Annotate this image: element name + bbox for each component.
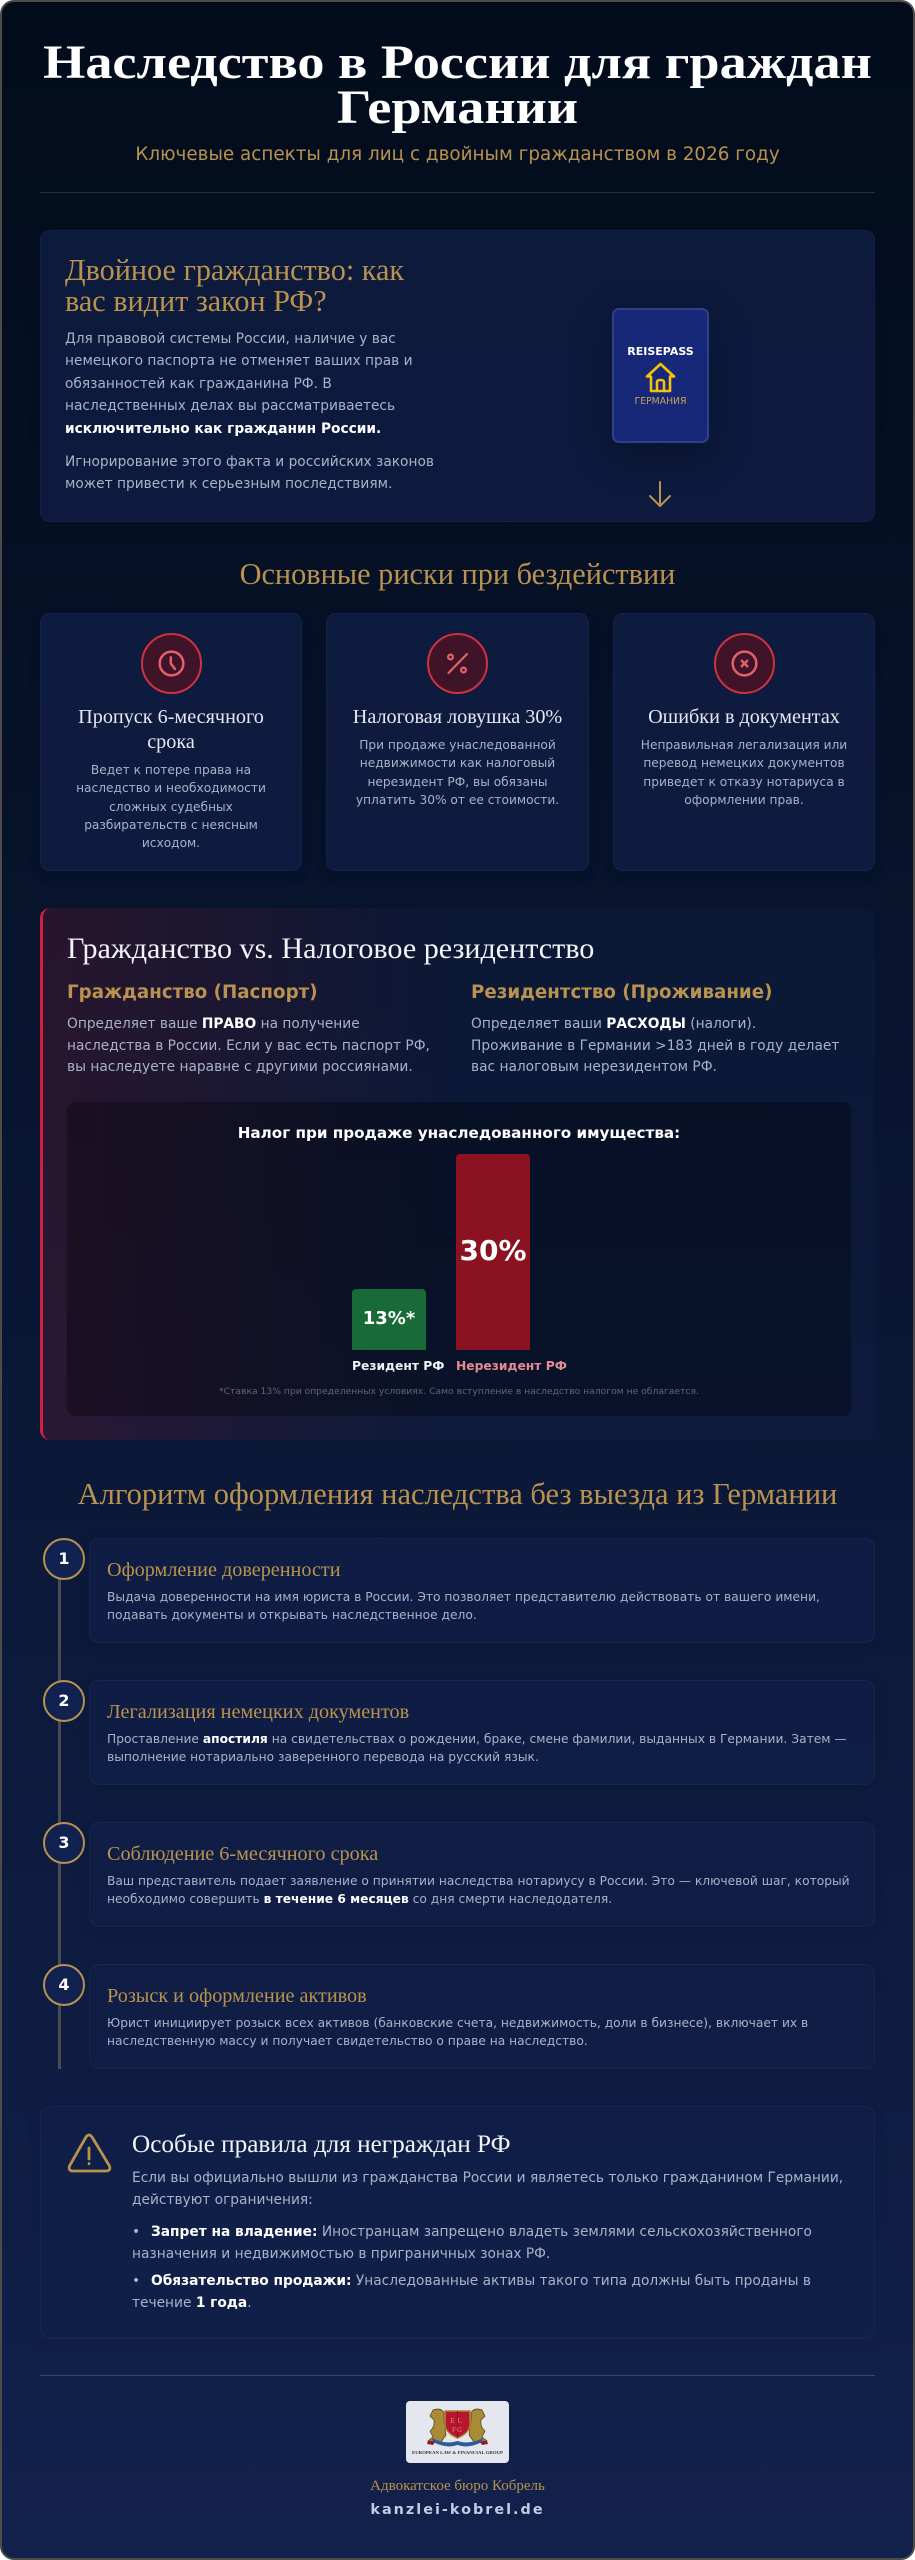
step 3 title: Соблюдение 6-месячного срока [107, 1843, 378, 1865]
risk 2 title: Налоговая ловушка 30% [353, 706, 562, 728]
panel: dual citizenship [40, 230, 875, 522]
text: dual citizenship explanation: наследственных делах вы рассматриваетесь [65, 398, 395, 414]
residency text [471, 1016, 839, 1075]
risk 2 text: нерезидент РФ, вы обязаны [367, 775, 548, 789]
text: dual citizenship explanation: немецкого паспорта не отменяет ваших прав и [65, 353, 413, 369]
column: residency [471, 982, 839, 1075]
step 3 card [89, 1822, 875, 1927]
text: warning about ignoring: может привести к серьезным последствиям. [65, 476, 392, 492]
icon: percent [427, 633, 488, 694]
text: dual citizenship explanation [65, 331, 413, 437]
list item: ownership ban: назначения и недвижимостью в приграничных зонах РФ. [132, 2246, 550, 2262]
passport label: REISEPASS [627, 345, 694, 358]
step 1 number [43, 1538, 85, 1580]
residency text: Проживание в Германии >183 дней в году делает [471, 1038, 839, 1054]
risk 3 title: Ошибки в документах [648, 706, 840, 728]
heading: risks: Основные риски при бездействии [240, 557, 675, 591]
step 4 text: наследственную массу и получает свидетельство о праве на наследство. [107, 2034, 588, 2048]
risk 1 title: Пропуск 6-месячного [78, 706, 264, 728]
step 4 number: 4 [58, 1975, 70, 1994]
risk 3 text: Неправильная легализация или [641, 738, 847, 752]
panel: risk 1 [40, 613, 302, 871]
logo: FG [452, 2426, 463, 2434]
risk 1 text: Ведет к потере права на [91, 763, 251, 777]
passport country: ГЕРМАНИЯ [635, 396, 686, 407]
title: Наследство в России для граждан [43, 36, 872, 89]
timeline line [58, 1560, 61, 2069]
list item: ownership ban: • [132, 2224, 140, 2240]
panel: risk 3 [613, 613, 875, 871]
list item: sale obligation: течение 1 года. [132, 2295, 252, 2311]
firm name: Адвокатское бюро Кобрель [370, 2478, 545, 2494]
logo: EL [450, 2417, 465, 2425]
logo: EUROPEAN LAW & FINANCIAL GROUP [412, 2450, 503, 2455]
text: dual citizenship explanation: исключительно как гражданин России. [65, 421, 381, 437]
step 4 text: Юрист инициирует розыск всех активов (банковские счета, недвижимость, доли в бизнесе), включает их в [107, 2016, 808, 2030]
arrow: down [649, 481, 671, 507]
text: dual citizenship explanation: Для правовой системы России, наличие у вас [65, 331, 396, 347]
bar: non-resident: 30% [459, 1234, 527, 1267]
bar: resident: 13%* [363, 1308, 415, 1329]
risk 1 title [78, 706, 264, 753]
list item: ownership ban [132, 2224, 812, 2262]
risk 1 text: сложных судебных [109, 800, 233, 814]
step 4 title: Розыск и оформление активов [107, 1985, 367, 2007]
text: special rules intro: Если вы официально вышли из гражданства России и являетесь только гражданином Германии, [132, 2170, 843, 2186]
step 1 text [107, 1590, 820, 1622]
text: special rules intro: действуют ограничения: [132, 2192, 313, 2208]
step 3 text [107, 1874, 850, 1906]
citizenship text: Определяет ваше ПРАВО на получение [67, 1016, 360, 1032]
step 2 [43, 1680, 875, 1785]
step 1 title: Оформление доверенности [107, 1559, 341, 1581]
step 1 text: подавать документы и открывать наследственное дело. [107, 1608, 477, 1622]
subtitle: Ключевые аспекты для лиц с двойным гражданством в 2026 году [135, 144, 780, 165]
heading: special rules: Особые правила для неграждан РФ [132, 2131, 511, 2158]
citizenship text: вы наследуете наравне с другими россиянами. [67, 1059, 413, 1075]
heading: dual citizenship [65, 253, 404, 318]
panel: citizenship vs residency [40, 908, 875, 1440]
icon: house [646, 362, 676, 392]
risk 3 text: перевод немецких документов [643, 756, 845, 770]
step 3 text: необходимо совершить в течение 6 месяцев со дня смерти наследодателя. [107, 1892, 612, 1906]
step 3 [43, 1822, 875, 1927]
risk 2 text: При продаже унаследованной [359, 738, 556, 752]
step 2 title: Легализация немецких документов [107, 1701, 409, 1723]
step 2 text: выполнение нотариально заверенного перевода на русский язык. [107, 1750, 539, 1764]
citizenship text [67, 1016, 430, 1075]
chart footnote: *Ставка 13% при определенных условиях. Само вступление в наследство налогом не облагается. [219, 1386, 699, 1397]
residency heading: Резидентство (Проживание) [471, 982, 772, 1003]
risk 1 text: разбирательств с неясным [84, 818, 258, 832]
label: non-resident: Нерезидент РФ [456, 1359, 567, 1373]
step 2 text [107, 1732, 847, 1764]
step 4 [43, 1964, 875, 2069]
step 3 text: Ваш представитель подает заявление о принятии наследства нотариусу в России. Это — ключевой шаг, который [107, 1874, 850, 1888]
heading: citizenship vs residency: Гражданство vs. Налоговое резидентство [67, 931, 594, 965]
step 3 number [43, 1822, 85, 1864]
website: kanzlei-kobrel.de [370, 2502, 545, 2518]
residency text: Определяет ваши РАСХОДЫ (налоги). [471, 1016, 756, 1032]
residency text: вас налоговым нерезидентом РФ. [471, 1059, 717, 1075]
step 4 text [107, 2016, 808, 2048]
heading: dual citizenship: Двойное гражданство: как [65, 253, 404, 287]
bar: non-resident [456, 1154, 530, 1350]
step 2 number [43, 1680, 85, 1722]
risk 1 text: исходом. [142, 836, 200, 850]
icon: warning triangle [68, 2134, 112, 2172]
chart title: Налог при продаже унаследованного имущества: [238, 1124, 680, 1142]
list item: ownership ban: Запрет на владение: Иностранцам запрещено владеть землями сельскохозяйственного [151, 2224, 812, 2240]
icon: error cross [714, 633, 775, 694]
heading: algorithm: Алгоритм оформления наследства без выезда из Германии [78, 1477, 837, 1511]
citizenship text: наследства в России. Если у вас есть паспорт РФ, [67, 1038, 430, 1054]
footer divider [40, 2375, 875, 2376]
risk 3 text [641, 738, 847, 807]
panel: risk 2 [326, 613, 589, 871]
step 4 number [43, 1964, 85, 2006]
logo [406, 2401, 509, 2463]
risk 3 text: приведет к отказу нотариуса в [643, 775, 845, 789]
step 1 text: Выдача доверенности на имя юриста в России. Это позволяет представителю действовать от вашего имени, [107, 1590, 820, 1604]
column: citizenship [67, 982, 430, 1075]
risk 2 text: недвижимости как налоговый [360, 756, 555, 770]
text: dual citizenship explanation: обязанностей как гражданина РФ. В [65, 376, 332, 392]
list item: sale obligation: Обязательство продажи: Унаследованные активы такого типа должны быть проданы в [151, 2273, 811, 2289]
step 1 card [89, 1538, 875, 1643]
risk 1 title: срока [147, 731, 195, 753]
icon: clock [141, 633, 202, 694]
panel: bar chart [67, 1102, 851, 1416]
step 1 [43, 1538, 875, 1643]
risk 3 text: оформлении прав. [684, 793, 804, 807]
header divider [40, 192, 875, 193]
label: resident: Резидент РФ [352, 1359, 444, 1373]
risk 1 text [76, 763, 266, 850]
panel: special rules [40, 2106, 875, 2339]
list item: sale obligation [132, 2273, 811, 2311]
step 1 number: 1 [58, 1549, 70, 1568]
citizenship heading: Гражданство (Паспорт) [67, 982, 318, 1003]
step 2 text: Проставление апостиля на свидетельствах о рождении, браке, смене фамилии, выданных в Германии. Затем — [107, 1732, 847, 1746]
icon: passport [612, 308, 709, 443]
title [43, 36, 872, 134]
risk 2 text [356, 738, 559, 807]
bar: resident [352, 1289, 426, 1350]
text: warning about ignoring: Игнорирование этого факта и российских законов [65, 454, 434, 470]
text: warning about ignoring [65, 454, 434, 492]
step 2 number: 2 [58, 1691, 70, 1710]
risk 2 text: уплатить 30% от ее стоимости. [356, 793, 559, 807]
step 3 number: 3 [58, 1833, 70, 1852]
text: special rules intro [132, 2170, 843, 2208]
list item: sale obligation: • [132, 2273, 140, 2289]
step 2 card [89, 1680, 875, 1785]
risk 1 text: наследство и необходимости [76, 781, 266, 795]
step 4 card [89, 1964, 875, 2069]
heading: dual citizenship: вас видит закон РФ? [65, 284, 327, 318]
title: Германии [337, 81, 578, 134]
